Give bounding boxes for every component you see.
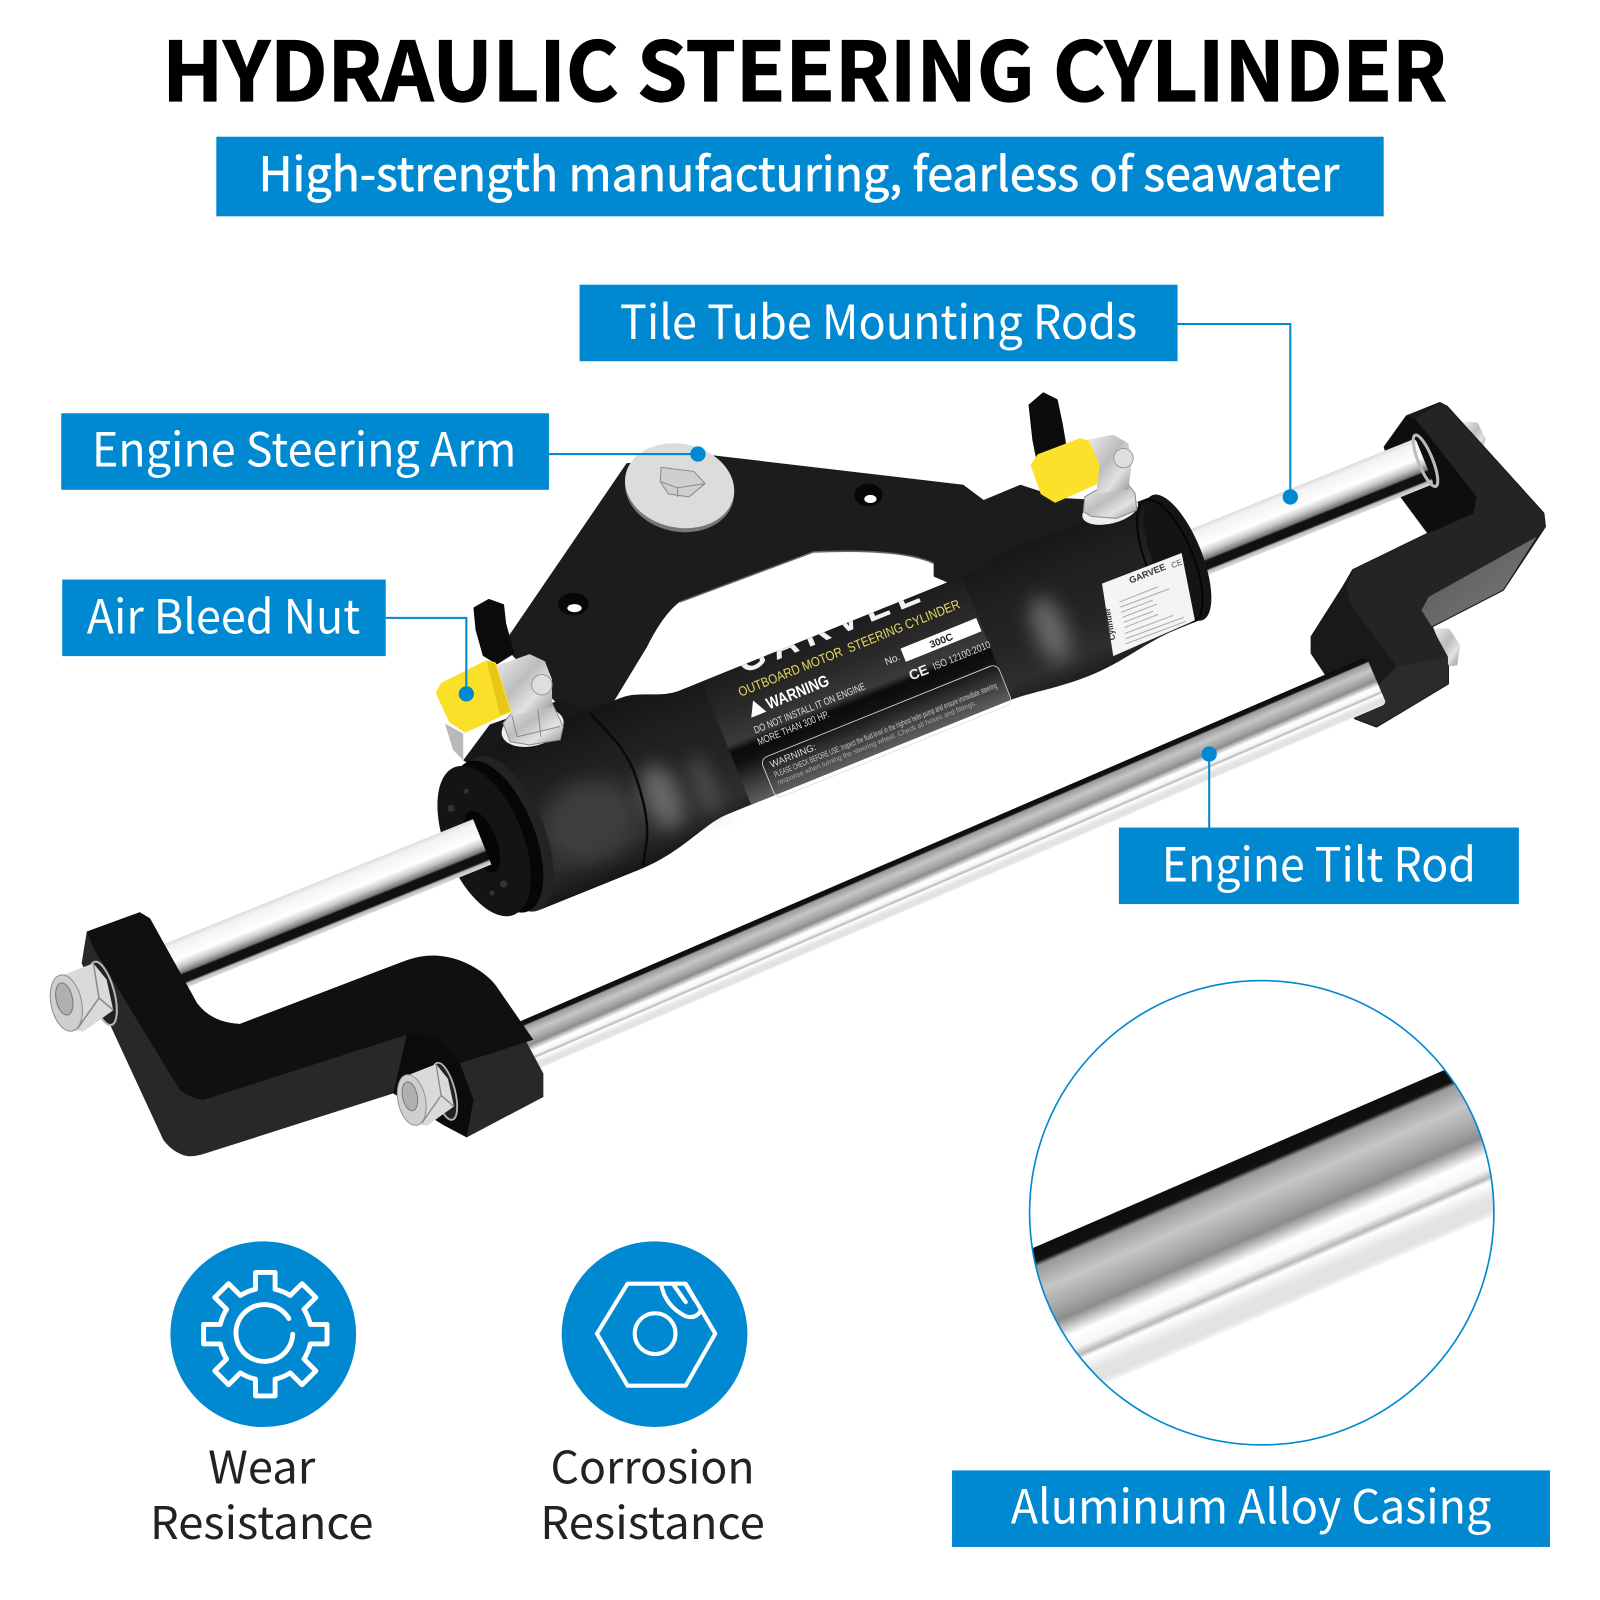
tube label text: DO NOT INSTALL IT ON ENGINE (752, 681, 867, 736)
brand text on tube, mostly wrapped out of view: GARVEE (730, 571, 925, 681)
callout: engine tilt rod (1119, 746, 1519, 904)
tube label text: WARNING (764, 672, 832, 713)
tube label text: 300C (928, 632, 956, 651)
tube label text: ISO 12100:2010 (932, 640, 993, 673)
callout: air bleed nut: Air Bleed Nut (87, 580, 360, 648)
cylinder head boss, left (463, 700, 617, 806)
subtitle banner: High-strength manufacturing, fearless of seawater (259, 137, 1340, 205)
nuts behind right bracket (1432, 421, 1486, 667)
tube label text: CE (907, 662, 931, 684)
callout: tilt tube mounting rods: Tile Tube Mounting Rods (620, 285, 1137, 353)
bracket nut recess (393, 1034, 473, 1137)
callout: tilt tube mounting rods (580, 285, 1298, 505)
body highlights (529, 592, 1082, 877)
callout: air bleed nut (62, 580, 474, 702)
upper rod, right section (1142, 433, 1442, 597)
upper rod, left section (154, 819, 491, 993)
left bracket (82, 912, 543, 1156)
nut on left bracket, lower (393, 1060, 462, 1128)
tube label text: MORE THAN 300 HP. (756, 709, 831, 748)
callout: engine tilt rod: Engine Tilt Rod (1162, 828, 1476, 896)
magnified view: aluminum alloy casing (1028, 980, 1495, 1446)
tube label text: OUTBOARD MOTOR STEERING CYLINDER (736, 597, 962, 700)
callout: engine steering arm: Engine Steering Arm (92, 412, 516, 480)
label: corrosion resistance: Resistance (540, 1487, 765, 1552)
bracket front face (87, 912, 533, 1100)
data plate on right head (1102, 553, 1195, 656)
tube label text: response when turning the steering wheel. Check all hoses and fittings. (776, 699, 978, 787)
icon: gear, wear resistance (170, 1241, 356, 1427)
label: wear resistance (150, 1432, 373, 1552)
cylinder body (528, 494, 1212, 910)
icon: hex nut, corrosion resistance (562, 1241, 747, 1427)
nut on left bracket, upper (45, 959, 122, 1034)
right bracket (1312, 403, 1545, 727)
label: wear resistance: Wear (208, 1432, 316, 1497)
lower engine tilt rod (509, 657, 1386, 1073)
bracket inner recess (1385, 416, 1477, 533)
data plate on right head: Cylinder (1103, 606, 1117, 641)
tube label text: No. (883, 652, 902, 668)
data plate on right head: CE (1170, 557, 1184, 570)
bracket top face (1347, 403, 1545, 667)
callout: engine steering arm (61, 412, 706, 490)
tube label text (731, 591, 1014, 799)
product: hydraulic steering cylinder assembly (45, 393, 1545, 1156)
tube label text: PLEASE CHECK BEFORE USE: Inspect the fluid level in the highest helm pump and ensure immediate steering (773, 681, 999, 779)
right air bleed fitting (1030, 393, 1141, 530)
label: corrosion resistance: Corrosion (551, 1432, 755, 1497)
bracket lower collar (1355, 657, 1448, 727)
washer and bolt on steering arm (617, 433, 742, 542)
head seam lines (590, 713, 647, 866)
steering arm plate (508, 455, 1153, 719)
tube label text: WARNING: (769, 742, 818, 771)
left air bleed fitting (437, 600, 568, 760)
label: corrosion resistance (540, 1432, 765, 1552)
title: HYDRAULIC STEERING CYLINDER (162, 6, 1447, 125)
bracket lit side face (1421, 537, 1537, 627)
label: wear resistance: Resistance (150, 1487, 373, 1552)
caption: aluminum alloy casing: Aluminum Alloy Casing (1011, 1469, 1491, 1537)
left end flange (418, 743, 573, 934)
data plate on right head: GARVEE (1128, 562, 1167, 586)
